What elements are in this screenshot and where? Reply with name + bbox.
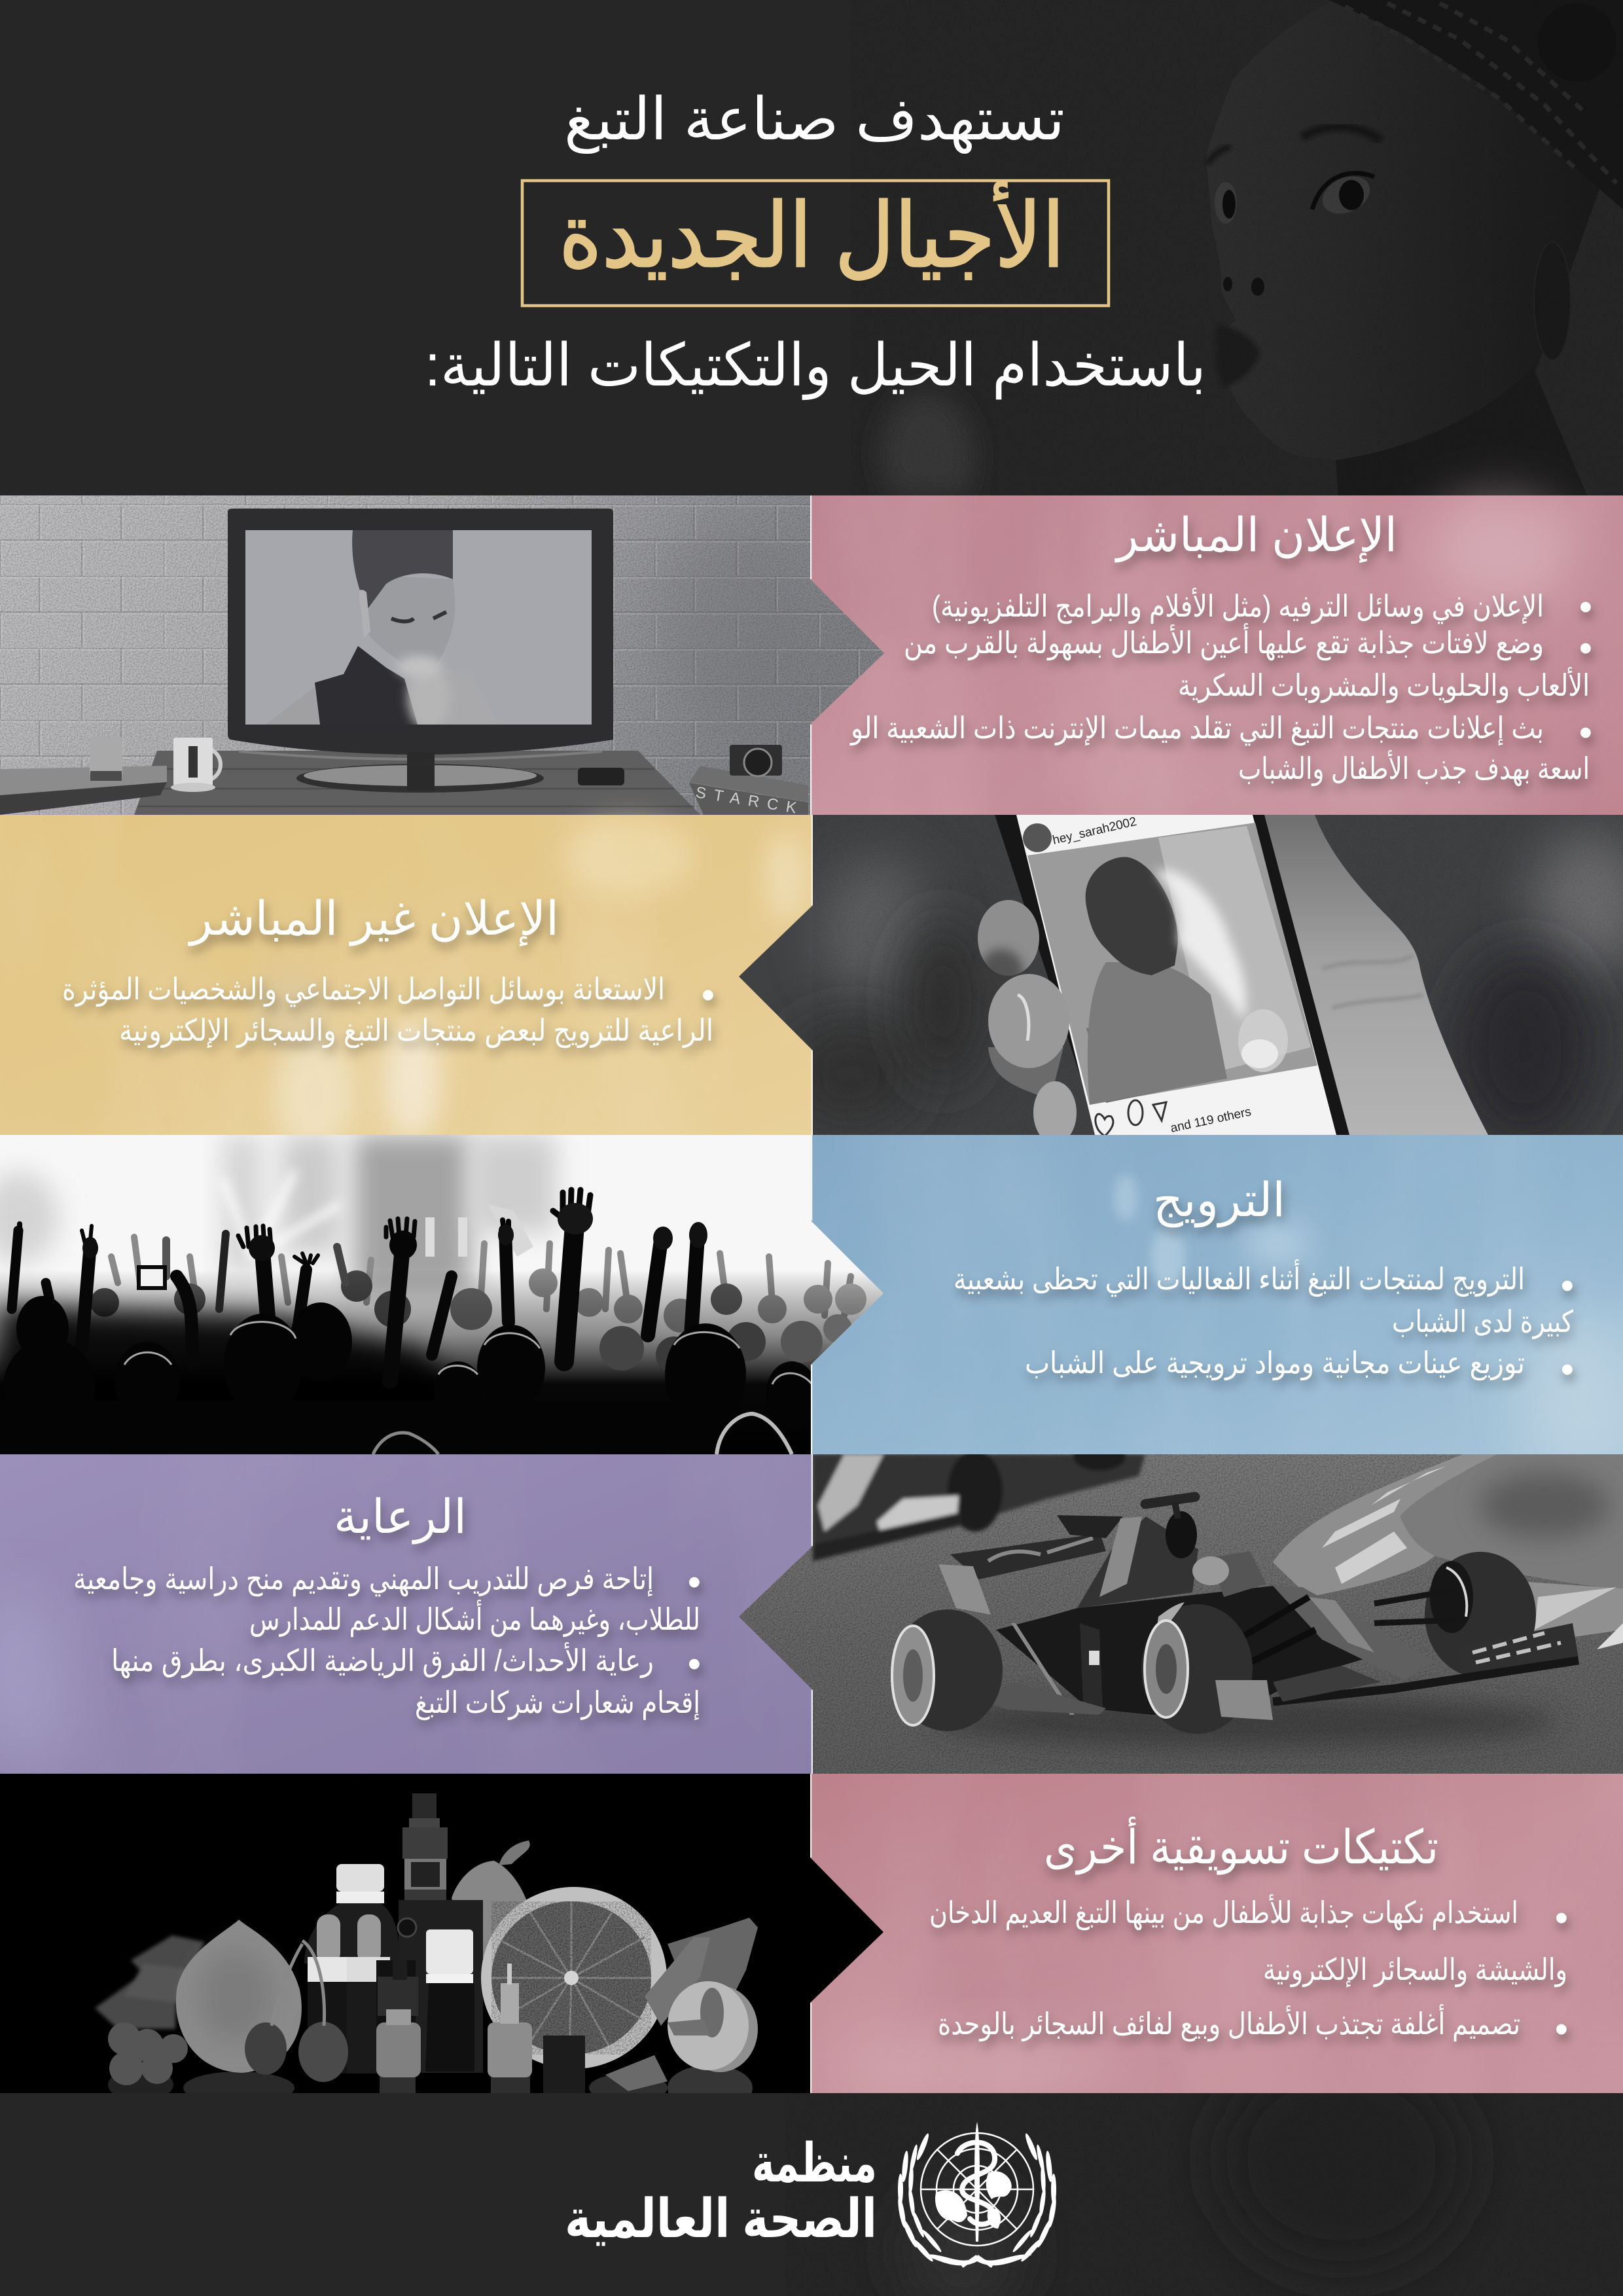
bullet list: والشيشة والسجائر الإلكترونية: [1263, 1952, 1567, 1988]
phone screen: hey_sarah2002: [1051, 815, 1138, 848]
phone screen: [1016, 815, 1336, 1136]
logo wordmark: منظمة: [752, 2134, 877, 2193]
bullet list: توزيع عينات مجانية ومواد ترويجية على الشباب: [1025, 1346, 1525, 1381]
bullet list: •: [1555, 2008, 1568, 2051]
bullet list: رعاية الأحداث/ الفرق الرياضية الكبرى، بطرق منها: [111, 1641, 654, 1679]
distant hands and heads: [90, 1204, 866, 1333]
bullet list: [62, 972, 715, 1049]
bullet list: [954, 1259, 1574, 1391]
grapes: [108, 2022, 188, 2085]
bullet list: [849, 586, 1592, 787]
front wing: [1215, 1623, 1578, 1720]
bullet list: إقحام شعارات شركات التبغ: [415, 1685, 700, 1721]
pear: [452, 1861, 533, 1964]
bullet list: تصميم أغلفة تجتذب الأطفال وبيع لفائف السجائر بالوحدة: [938, 2004, 1520, 2042]
panel: other marketing tactics: [810, 1774, 1623, 2101]
bullet list: إتاحة فرص للتدريب المهني وتقديم منح دراسية وجامعية: [73, 1562, 654, 1597]
vape pen: [398, 1793, 483, 2073]
logo wordmark: [565, 2134, 877, 2249]
heading: تكتيكات تسويقية أخرى: [1044, 1816, 1438, 1875]
panel: promotion: [811, 1135, 1623, 1479]
photo: concert crowd with raised hands: [0, 1135, 890, 1454]
panel: direct advertising: [810, 495, 1623, 825]
phone held up: [139, 1267, 165, 1288]
phone screen: and 119 others: [1169, 1105, 1253, 1136]
panel: sponsorship: [0, 1454, 813, 1774]
highlighted title: الأجيال الجديدة: [559, 181, 1065, 285]
title line 3: باستخدام الحيل والتكتيكات التالية:: [425, 333, 1206, 401]
heading: الإعلان غير المباشر: [188, 893, 559, 946]
dropper bottle: [304, 1864, 399, 2073]
bullet list: استخدام نكهات جذابة للأطفال من بينها التبغ العديم الدخان: [929, 1893, 1518, 1931]
leaves left: [95, 1935, 204, 2029]
white divider: [811, 1135, 812, 1454]
white divider: [810, 1774, 812, 2093]
cherries: [245, 1941, 348, 2082]
white divider: [812, 815, 813, 1135]
bullet list: •: [1561, 1265, 1574, 1307]
track kerb and grass: [1273, 1454, 1623, 1649]
panel: indirect advertising: [0, 815, 813, 1152]
apricot: [668, 1981, 758, 2072]
highlight box: [522, 181, 1109, 306]
hand: [1263, 815, 1488, 1135]
race car: [892, 1497, 1536, 1734]
bullet list: الاستعانة بوسائل التواصل الاجتماعي والشخصيات المؤثرة: [62, 972, 665, 1007]
title block: [425, 87, 1206, 401]
orange half: [481, 1887, 667, 2069]
shadow under car: [929, 1695, 1558, 1748]
white divider: [810, 495, 812, 815]
television: [228, 509, 613, 793]
bullet list: •: [1555, 1897, 1568, 1939]
raised arms: [12, 1217, 698, 1381]
small glass vials: [376, 1964, 532, 2077]
heading: الرعاية: [334, 1491, 467, 1545]
heading: الترويج: [1153, 1174, 1285, 1228]
bullet list: •: [1579, 627, 1592, 670]
foreground heads: [0, 1296, 818, 1454]
bullet list: [929, 1893, 1568, 2051]
header photo: woman's face exhaling smoke: [880, 0, 1623, 495]
right leaves: [605, 1918, 758, 2091]
phone body: [995, 815, 1349, 1135]
background car: [813, 1442, 1145, 1561]
bullet list: الراعية للترويج لبعض منتجات التبغ والسجائر الإلكترونية: [119, 1013, 713, 1049]
bullet list: كبيرة لدى الشباب: [1392, 1304, 1573, 1340]
fingers: [978, 900, 1077, 1144]
title line 1: تستهدف صناعة التبغ: [564, 87, 1065, 154]
white divider: [812, 1454, 813, 1774]
television screen: [245, 530, 592, 730]
photo: hand holding smartphone with social media post: [733, 815, 1623, 1145]
photo: television on a desk against brick wall: [0, 495, 890, 818]
reflections: [108, 2065, 753, 2111]
bullet list: •: [1579, 711, 1592, 754]
black bottle: [543, 2036, 585, 2093]
camera and books: STARCK: [694, 783, 806, 818]
logo wordmark: الصحة العالمية: [565, 2189, 877, 2249]
bullet list: •: [1579, 586, 1592, 628]
white-capped bottle: [376, 1929, 474, 2073]
bullet list: •: [688, 1643, 701, 1685]
bullet list: الترويج لمنتجات التبغ أثناء الفعاليات التي تحظى بشعبية: [954, 1259, 1525, 1297]
bullet list: •: [688, 1561, 701, 1604]
footer background: [0, 2049, 1623, 2296]
bullet list: •: [1561, 1348, 1574, 1391]
photo: Formula 1 racing car on track: [733, 1442, 1623, 1774]
icon: World Health Organization emblem: [897, 2122, 1058, 2267]
bullet list: للطلاب، وغيرهما من أشكال الدعم للمدارس: [249, 1600, 700, 1638]
bullet list: •: [702, 974, 715, 1016]
photo: e-cigarette bottles and fruit on black: [0, 1774, 890, 2111]
hands: [20, 1190, 590, 1263]
rim lights on heads: [124, 1322, 813, 1454]
peach: [176, 1920, 302, 2073]
camera and books: [689, 745, 808, 818]
bullet list: [73, 1561, 701, 1721]
heading: الإعلان المباشر: [1115, 509, 1397, 563]
